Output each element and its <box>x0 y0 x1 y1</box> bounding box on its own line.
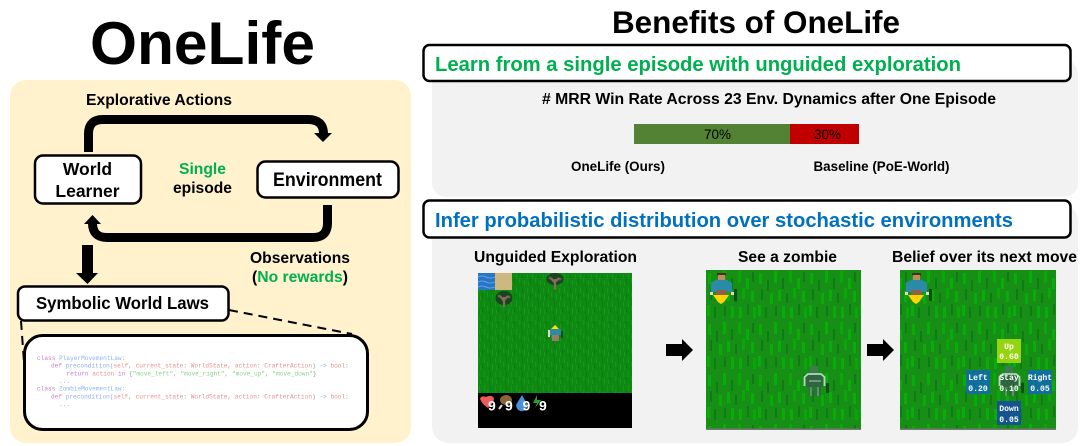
label: observations: (No rewards) <box>252 269 348 286</box>
panel: single episode benefit <box>424 45 1078 197</box>
game frame: belief over next move <box>900 270 1056 430</box>
belief: up 0.60: 0.60 <box>999 353 1019 362</box>
belief: stay 0.10: 0.10 <box>999 385 1019 394</box>
inventory bar: 9 <box>488 398 496 414</box>
code block: class PlayerMovementLaw: <box>37 355 125 362</box>
label: single episode <box>173 161 232 197</box>
header: infer probabilistic distribution: Infer probabilistic distribution over stochastic environments <box>435 210 1013 232</box>
label: See a zombie: See a zombie <box>738 249 837 266</box>
box: Environment: Environment <box>273 170 383 191</box>
bar chart: win rate: 30% <box>814 126 841 142</box>
label: observations <box>250 250 350 286</box>
header: infer probabilistic distribution <box>424 200 1070 238</box>
icon: tree <box>496 291 512 307</box>
title: OneLife: OneLife <box>90 10 315 77</box>
label: single episode: episode <box>173 180 232 197</box>
panel: OneLife loop diagram <box>10 80 411 443</box>
header: learn from a single episode: Learn from a single episode with unguided exploration <box>435 54 961 76</box>
belief: right 0.05 <box>1028 370 1052 394</box>
code block: class ZombieMovementLaw: <box>37 386 125 393</box>
icon: player <box>548 325 563 341</box>
code block: def precondition(self, current_state: WorldState, action: CrafterAction) -> bool: <box>51 363 349 370</box>
panel: probabilistic inference benefit <box>424 200 1078 443</box>
icon: tree <box>546 273 564 290</box>
heading: Benefits of OneLife: Benefits of OneLife <box>612 5 900 40</box>
code block: def precondition(self, current_state: WorldState, action: CrafterAction) -> bool: <box>51 393 349 400</box>
box: Symbolic World Laws: Symbolic World Laws <box>36 293 209 313</box>
belief: down 0.05: 0.05 <box>999 416 1019 425</box>
box: World Learner: World <box>63 159 112 179</box>
inventory bar: 9 <box>539 398 547 414</box>
belief: left 0.20 <box>966 370 990 394</box>
belief: right 0.05: Right <box>1028 374 1052 383</box>
arrow: learner to laws <box>76 245 98 284</box>
code block: ... <box>59 378 70 385</box>
arrow: observations to learner <box>84 205 328 238</box>
belief: stay 0.10: Stay <box>999 374 1019 383</box>
inventory bar: 9 <box>522 398 530 414</box>
belief: down 0.05: Down <box>999 405 1019 414</box>
chart title: # MRR Win Rate Across 23 Env. Dynamics after One Episode <box>542 91 996 108</box>
icon: player <box>710 273 737 304</box>
label: Belief over its next move: Belief over its next move <box>892 249 1077 266</box>
inventory bar: 9 <box>505 398 513 414</box>
bar chart: win rate <box>634 124 859 144</box>
belief: down 0.05 <box>997 401 1021 425</box>
header: learn from a single episode <box>424 45 1070 81</box>
icon: zombie <box>804 366 829 396</box>
code block: ... <box>59 401 70 408</box>
belief: up 0.60 <box>997 339 1021 363</box>
label: OneLife (Ours): OneLife (Ours) <box>571 158 665 174</box>
label: explorative actions: Explorative Actions <box>86 92 232 109</box>
label: single episode: Single <box>179 161 226 178</box>
icon: zombie <box>1000 366 1024 396</box>
belief: stay 0.10 <box>999 374 1019 394</box>
game frame: see a zombie <box>706 270 861 430</box>
arrow: actions to environment <box>88 120 332 152</box>
inventory bar <box>480 395 547 414</box>
belief: up 0.60: Up <box>1004 343 1014 352</box>
arrow: zombie to belief <box>867 339 894 361</box>
label: observations: Observations <box>250 250 350 267</box>
game frame: unguided exploration <box>478 273 632 428</box>
belief: right 0.05: 0.05 <box>1030 385 1050 394</box>
code block: return action in {"move_left", "move_right", "move_up", "move_down"} <box>66 370 317 377</box>
label: Baseline (PoE-World): Baseline (PoE-World) <box>814 158 950 174</box>
icon: player <box>905 273 932 304</box>
belief: left 0.20: Left <box>968 374 988 383</box>
label: Unguided Exploration: Unguided Exploration <box>474 249 637 266</box>
arrow: exploration to zombie <box>666 339 693 361</box>
box: Environment <box>258 162 398 198</box>
box: World Learner: Learner <box>55 181 120 201</box>
box: Symbolic World Laws <box>18 286 228 320</box>
code block <box>24 336 368 430</box>
belief: left 0.20: 0.20 <box>968 385 988 394</box>
bar chart: win rate: 70% <box>704 126 731 142</box>
box: World Learner <box>35 156 141 204</box>
